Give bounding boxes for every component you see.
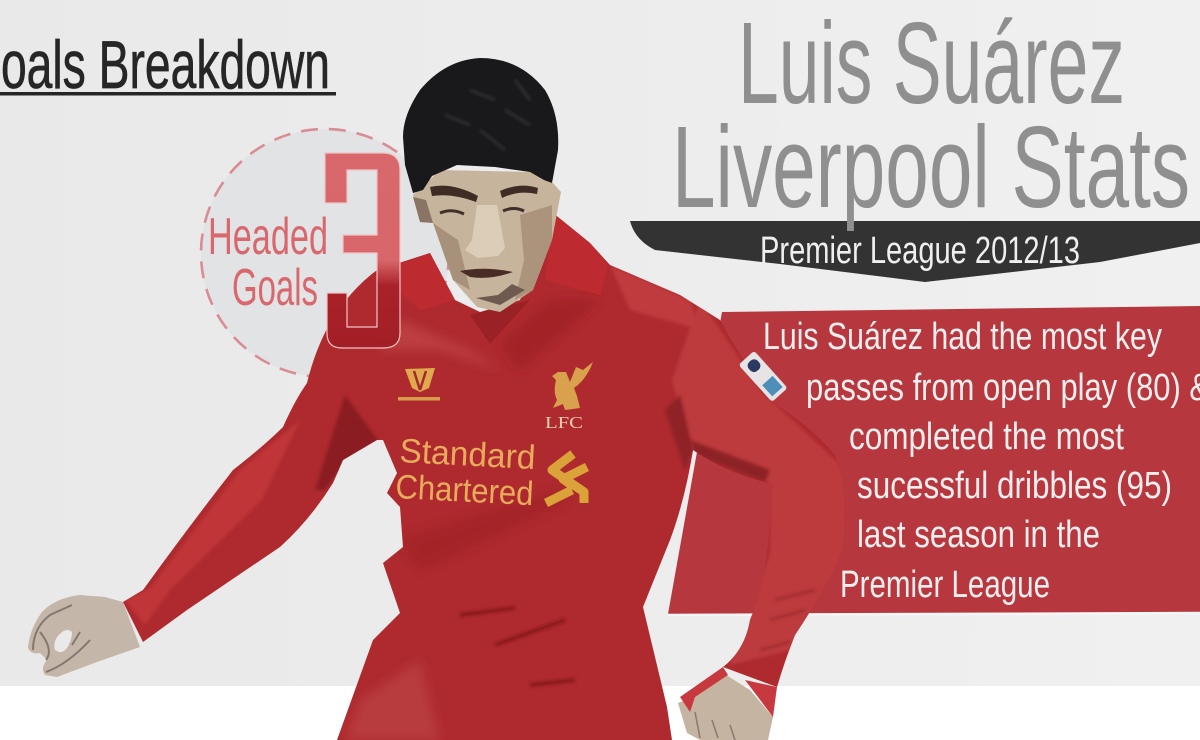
logo: liverbird crest (545, 362, 593, 432)
logo: warrior (398, 368, 440, 400)
logo: liverbird crest: LFC (545, 413, 583, 432)
number: 3 headed goals (325, 153, 400, 348)
face (413, 170, 561, 312)
callout: headed goals circle (201, 129, 449, 377)
banner: premier league season: Premier League 2012/13 (760, 230, 1080, 272)
sponsor: standard chartered: Standard (399, 432, 536, 477)
left hand (28, 595, 140, 677)
panel: red stats text block: last season in the (857, 514, 1100, 556)
banner: premier league season (630, 221, 1200, 282)
callout: headed goals circle: Headed (208, 208, 328, 266)
collar (377, 213, 608, 310)
sponsor: standard chartered: Chartered (395, 468, 534, 513)
badge: premier league sleeve (739, 351, 788, 402)
right fist (678, 667, 777, 740)
hair (403, 58, 558, 193)
panel: red stats text block (668, 306, 1200, 615)
jersey (123, 213, 846, 740)
title (672, 0, 1190, 232)
heading: goals breakdown (0, 27, 336, 103)
panel: red stats text block: completed the most (849, 416, 1124, 458)
panel: red stats text block: Premier League (840, 564, 1050, 606)
figure: player (28, 58, 846, 740)
callout: headed goals circle: Goals (232, 259, 318, 317)
sponsor: standard chartered (395, 432, 587, 513)
